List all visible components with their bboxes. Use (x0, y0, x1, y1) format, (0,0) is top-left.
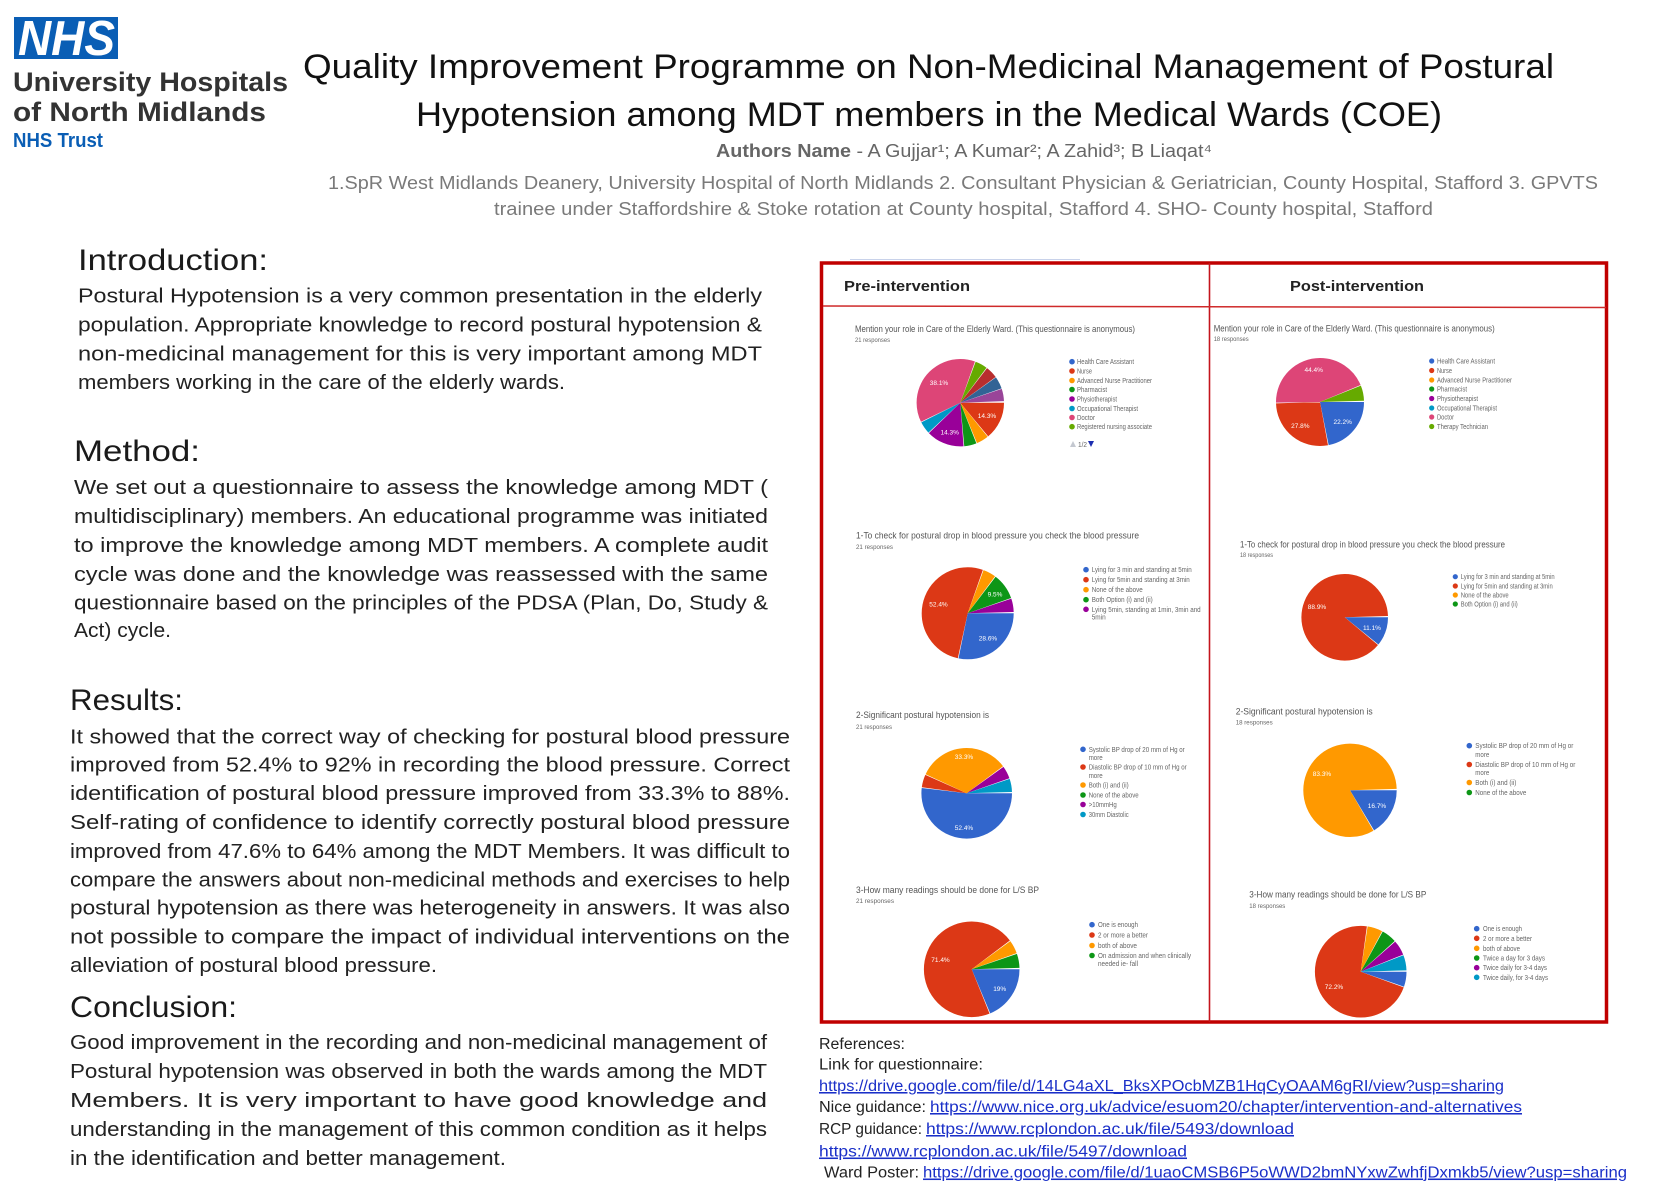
chart: post postural drop pie: 11.1% (1363, 625, 1381, 632)
text block: conclusion body: Members. It is very important to have good knowledge and (70, 1089, 767, 1112)
chart: pre postural drop pie: 9.5% (988, 592, 1003, 598)
panel: pre and post intervention comparison frame (822, 260, 1606, 1022)
chart: pre postural drop pie: 21 responses (856, 544, 894, 551)
chart: pre significant hypotension pie: Systolic BP drop of 20 mm of Hg or (1089, 747, 1185, 754)
chart: post role pie: Advanced Nurse Practitioner (1437, 378, 1513, 384)
chart: pre role pie: 14.3% (978, 413, 996, 420)
text block: references: Nice guidance: (819, 1099, 926, 1116)
chart: pre role pie: Doctor (1077, 415, 1096, 422)
text block: introduction body: population. Appropriate knowledge to record postural hypotension & (78, 314, 762, 336)
chart: post role pie: Doctor (1437, 414, 1455, 422)
chart: pre readings pie (856, 885, 1191, 993)
chart: pre role pie: Registered nursing associate (1077, 424, 1152, 431)
title: Quality Improvement Programme on Non-Medicinal Management of Postural (303, 48, 1554, 86)
affiliations: trainee under Staffordshire & Stoke rotation at County hospital, Stafford 4. SHO- County hospital, Stafford (494, 199, 1433, 219)
chart: post readings pie (1249, 890, 1548, 995)
chart: post role pie: Mention your role in Care of the Elderly Ward. (This questionnaire is anonymous) (1214, 324, 1495, 334)
chart: pre postural drop pie: None of the above (1092, 587, 1143, 594)
authors: Authors Name - A Gujjar¹; A Kumar²; A Zahid³; B Liaqat⁴ (716, 141, 1212, 161)
chart: post readings pie: One is enough (1483, 926, 1522, 933)
chart: post readings pie: Twice a day for 3 days (1483, 956, 1545, 962)
chart: post readings pie: 18 responses (1249, 903, 1286, 910)
text block: references: RCP guidance: (819, 1121, 922, 1138)
chart: post role pie: Therapy Technician (1437, 424, 1488, 431)
chart: pre readings pie: On admission and when clinically (1098, 953, 1191, 960)
chart: post postural drop pie: None of the above (1461, 592, 1509, 600)
chart: post readings pie: 3-How many readings should be done for L/S BP (1249, 890, 1426, 900)
icon: NHS blue lozenge: NHS (18, 12, 115, 66)
chart: pre postural drop pie (856, 531, 1201, 642)
text block: method body: to improve the knowledge among MDT members. A complete audit (74, 534, 768, 557)
text block: references: https://drive.google.com/file/d/1uaoCMSB6P5oWWD2bmNYxwZwhfjDxmkb5/view?usp=sharing (923, 1164, 1627, 1182)
heading: Conclusion: Conclusion: (70, 991, 237, 1024)
text block: method body: questionnaire based on the principles of the PDSA (Plan, Do, Study & (74, 592, 768, 614)
panel: introduction (78, 244, 763, 394)
text block: conclusion body: Postural hypotension was observed in both the wards among the MDT (70, 1060, 768, 1083)
chart: pre role pie: 1/2 (1078, 442, 1087, 449)
chart: post role pie: 22.2% (1333, 419, 1352, 426)
logo: University Hospitals of North Midlands NHS Trust (13, 12, 288, 152)
chart: post significant hypotension pie: 83.3% (1313, 771, 1331, 778)
chart: pre role pie: Occupational Therapist (1077, 406, 1138, 413)
organisation name: University Hospitals (13, 67, 288, 97)
chart: pre readings pie: 2 or more a better (1098, 932, 1149, 940)
chart: pre readings pie: 19% (993, 986, 1006, 993)
text block: conclusion body: Good improvement in the recording and non-medicinal management of (70, 1031, 767, 1054)
text block: results body: improved from 47.6% to 64% among the MDT Members. It was difficult to (70, 840, 790, 863)
chart: pre significant hypotension pie: 2-Significant postural hypotension is (856, 710, 989, 720)
chart: pre significant hypotension pie (856, 710, 1187, 832)
chart: pre role pie: Pharmacist (1077, 387, 1107, 394)
chart: pre readings pie: needed ie- fall (1098, 961, 1138, 968)
text block: conclusion body: in the identification and better management. (70, 1147, 506, 1170)
chart: pre significant hypotension pie: more (1089, 773, 1103, 780)
text block: results body: It showed that the correct way of checking for postural blood pressure (70, 726, 790, 748)
chart: pre significant hypotension pie: None of the above (1089, 792, 1139, 800)
chart: post postural drop pie (1240, 540, 1555, 639)
chart: post role pie: Nurse (1437, 368, 1452, 375)
chart: pre readings pie: both of above (1098, 943, 1137, 950)
chart: pre readings pie: 71.4% (931, 957, 950, 964)
heading: Method: Method: (74, 435, 200, 468)
chart: post role pie: Occupational Therapist (1437, 406, 1497, 412)
text block: results body: alleviation of postural blood pressure. (70, 954, 437, 977)
text block: references: https://www.rcplondon.ac.uk/file/5497/download (819, 1144, 1187, 1160)
chart: pre role pie: Advanced Nurse Practitioner (1077, 378, 1153, 385)
text block: results body (70, 726, 790, 977)
chart: pre role pie: Nurse (1077, 368, 1092, 376)
organisation name (13, 67, 288, 127)
chart: pre role pie (855, 324, 1153, 449)
text block: references: https://drive.google.com/file/d/14LG4aXL_BksXPOcbMZB1HqCyOAAM6gRI/view?usp=sharing (819, 1078, 1504, 1095)
chart: post postural drop pie: Lying for 5min and standing at 3min (1461, 584, 1553, 590)
heading: Results: Results: (70, 684, 183, 717)
chart: post role pie (1214, 324, 1513, 431)
chart: pre readings pie: One is enough (1098, 922, 1138, 929)
text block: results body: compare the answers about non-medicinal methods and exercises to help (70, 868, 790, 892)
chart: post significant hypotension pie: None of the above (1475, 790, 1526, 797)
chart: post role pie: Health Care Assistant (1437, 358, 1495, 366)
chart: post significant hypotension pie: Systolic BP drop of 20 mm of Hg or (1475, 743, 1574, 750)
chart: pre postural drop pie: 5min (1092, 614, 1106, 622)
title (303, 48, 1554, 134)
heading: Introduction: Introduction: (78, 244, 268, 277)
chart: post significant hypotension pie: more (1475, 752, 1489, 759)
chart: pre significant hypotension pie: 30mm Diastolic (1089, 812, 1129, 819)
chart: post significant hypotension pie: 2-Significant postural hypotension is (1236, 707, 1373, 717)
text block: results body: improved from 52.4% to 92% in recording the blood pressure. Correct (70, 754, 790, 776)
chart: post readings pie: Twice daily, for 3-4 days (1483, 975, 1548, 982)
NHS Trust label: NHS Trust (13, 130, 103, 152)
chart: post postural drop pie: Lying for 3 min and standing at 5min (1461, 574, 1555, 581)
text block: conclusion body: understanding in the management of this common condition as it helps (70, 1118, 767, 1141)
chart: pre significant hypotension pie: Diastolic BP drop of 10 mm of Hg or (1089, 764, 1187, 772)
text block: results body: postural hypotension as there was heterogeneity in answers. It was also (70, 896, 790, 920)
chart: pre significant hypotension pie: 21 responses (856, 724, 893, 731)
chart: pre significant hypotension pie: 33.3% (955, 754, 973, 761)
chart: pre role pie: 21 responses (855, 337, 891, 344)
organisation name: of North Midlands (13, 97, 266, 127)
chart: post significant hypotension pie: Diastolic BP drop of 10 mm of Hg or (1475, 762, 1576, 769)
text block: references: https://www.rcplondon.ac.uk/file/5493/download (926, 1121, 1294, 1138)
text block: method body: We set out a questionnaire to assess the knowledge among MDT ( (74, 476, 768, 499)
text block: method body: cycle was done and the knowledge was reassessed with the same (74, 563, 768, 586)
chart: post role pie: Physiotherapist (1437, 396, 1478, 403)
chart: pre postural drop pie: Lying for 5min and standing at 3min (1092, 577, 1190, 584)
chart: pre significant hypotension pie: more (1089, 755, 1103, 762)
chart: pre postural drop pie: 52.4% (929, 602, 948, 608)
chart: post postural drop pie: 1-To check for postural drop in blood pressure you check the blood pressure (1240, 540, 1505, 550)
chart: post readings pie: Twice daily for 3-4 days (1483, 965, 1547, 972)
chart: post significant hypotension pie: 16.7% (1368, 803, 1386, 810)
chart: post postural drop pie: 18 responses (1240, 552, 1274, 559)
chart: post role pie: 18 responses (1214, 336, 1249, 343)
chart: post role pie: 44.4% (1304, 367, 1323, 374)
text block: method body (74, 476, 768, 642)
chart: pre significant hypotension pie: >10mmHg (1089, 802, 1117, 809)
chart: post readings pie: 2 or more a better (1483, 936, 1533, 943)
text block: references: Ward Poster: (824, 1164, 919, 1182)
chart: pre significant hypotension pie: Both (i) and (ii) (1089, 782, 1129, 790)
chart: pre role pie: 14.3% (940, 430, 959, 436)
text block: references: References: (819, 1036, 905, 1053)
chart: pre role pie: Mention your role in Care of the Elderly Ward. (This questionnaire is anonymous) (855, 324, 1135, 334)
chart: pre postural drop pie: 28.6% (979, 636, 997, 642)
chart: post role pie: Pharmacist (1437, 386, 1467, 394)
chart: post significant hypotension pie (1236, 707, 1576, 814)
text block: results body: not possible to compare the impact of individual interventions on the (70, 926, 790, 948)
heading: Pre-intervention: Pre-intervention (844, 278, 970, 295)
text block: references: Link for questionnaire: (819, 1056, 983, 1074)
chart: post readings pie: 72.2% (1325, 984, 1343, 991)
text block: introduction body (78, 284, 763, 394)
text block: conclusion body (70, 1031, 768, 1170)
chart: post significant hypotension pie: Both (i) and (ii) (1475, 780, 1516, 787)
text block: introduction body: members working in the care of the elderly wards. (78, 371, 565, 394)
text block: method body: Act) cycle. (74, 619, 171, 642)
chart: pre role pie: 38.1% (930, 380, 948, 387)
chart: pre postural drop pie: Both Option (i) and (ii) (1092, 597, 1153, 604)
chart: pre readings pie: 21 responses (856, 898, 895, 905)
text block: method body: multidisciplinary) members. An educational programme was initiated (74, 505, 768, 528)
title: Hypotension among MDT members in the Medical Wards (COE) (416, 96, 1442, 134)
affiliations: 1.SpR West Midlands Deanery, University Hospital of North Midlands 2. Consultant Physician & Geriatrician, County Hospital, Stafford 3. GPVTS (328, 173, 1598, 193)
chart: post postural drop pie: Both Option (i) and (ii) (1461, 602, 1518, 608)
text block: results body: identification of postural blood pressure improved from 33.3% to 88%. (70, 782, 790, 805)
text block: references (819, 1036, 1627, 1182)
panel: conclusion (70, 991, 768, 1170)
chart: pre significant hypotension pie: 52.4% (955, 825, 973, 832)
chart: post role pie: 27.8% (1291, 423, 1310, 430)
chart: pre role pie: Health Care Assistant (1077, 359, 1134, 366)
chart: post significant hypotension pie: 18 responses (1236, 720, 1273, 727)
text block: results body: Self-rating of confidence to identify correctly postural blood pressure (70, 811, 790, 834)
text block: introduction body: non-medicinal management for this is very important among MDT (78, 342, 763, 366)
heading: Post-intervention: Post-intervention (1290, 278, 1424, 295)
affiliations (328, 173, 1598, 219)
text block: references: https://www.nice.org.uk/advice/esuom20/chapter/intervention-and-alternatives (930, 1099, 1522, 1116)
chart: pre postural drop pie: Lying 5min, standing at 1min, 3min and (1092, 607, 1201, 614)
chart: post postural drop pie: 88.9% (1308, 604, 1326, 611)
chart: post significant hypotension pie: more (1475, 770, 1489, 777)
panel: results (70, 684, 790, 977)
chart: pre postural drop pie: 1-To check for postural drop in blood pressure you check the blood pressure (856, 531, 1139, 541)
chart: pre postural drop pie: Lying for 3 min and standing at 5min (1092, 567, 1192, 574)
panel: method (74, 435, 768, 642)
text block: introduction body: Postural Hypotension is a very common presentation in the elderly (78, 284, 763, 308)
chart: pre readings pie: 3-How many readings should be done for L/S BP (856, 885, 1039, 895)
chart: post readings pie: both of above (1483, 946, 1520, 953)
chart: pre role pie: Physiotherapist (1077, 396, 1117, 404)
